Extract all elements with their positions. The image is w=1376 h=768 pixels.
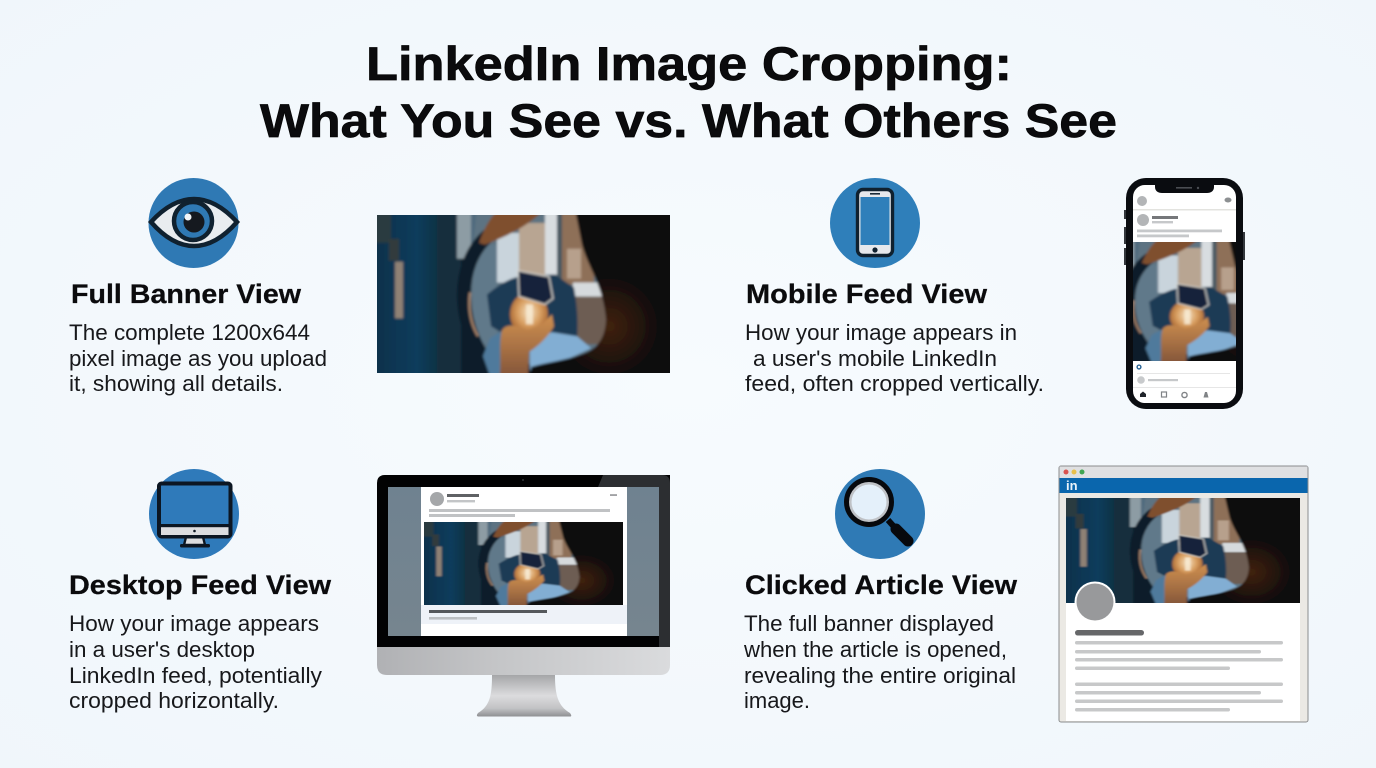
desktop monitor mockup [377,475,670,717]
icon: magnifying glass [835,469,925,559]
icon: desktop monitor [149,469,239,559]
description: in a user's desktop [69,637,255,662]
description [69,611,322,713]
heading: Desktop Feed View [69,570,331,600]
description: image. [744,688,810,713]
description: The full banner displayed [744,611,994,636]
full banner photo [371,209,676,379]
description: How your image appears in [745,320,1017,345]
panel: desktop feed view [69,469,670,717]
description: feed, often cropped vertically. [745,371,1044,396]
description [69,320,327,396]
description: LinkedIn feed, potentially [69,663,322,688]
panel: mobile feed view [745,178,1319,409]
description: when the article is opened, [743,637,1007,662]
browser article mockup [1059,466,1308,722]
description: pixel image as you upload [69,346,327,371]
description: a user's mobile LinkedIn [753,346,997,371]
heading: Mobile Feed View [746,279,987,309]
description [745,320,1044,396]
description: How your image appears [69,611,319,636]
panel: full banner view [69,178,676,396]
heading: Clicked Article View [745,570,1017,600]
description: revealing the entire original [744,663,1016,688]
title [260,37,1117,147]
heading: Full Banner View [71,279,301,309]
title: LinkedIn Image Cropping: [366,37,1012,90]
cropped photo [1133,242,1236,361]
browser article mockup: in [1066,478,1078,493]
cropped photo [420,519,627,608]
title: What You See vs. What Others See [260,94,1117,147]
icon: phone [830,178,920,268]
full photo [1061,494,1305,607]
description [743,611,1016,713]
description: it, showing all details. [69,371,283,396]
description: cropped horizontally. [69,688,279,713]
phone mockup [1045,178,1319,409]
description: The complete 1200x644 [69,320,310,345]
panel: clicked article view [743,466,1308,722]
icon: eye [148,178,238,268]
